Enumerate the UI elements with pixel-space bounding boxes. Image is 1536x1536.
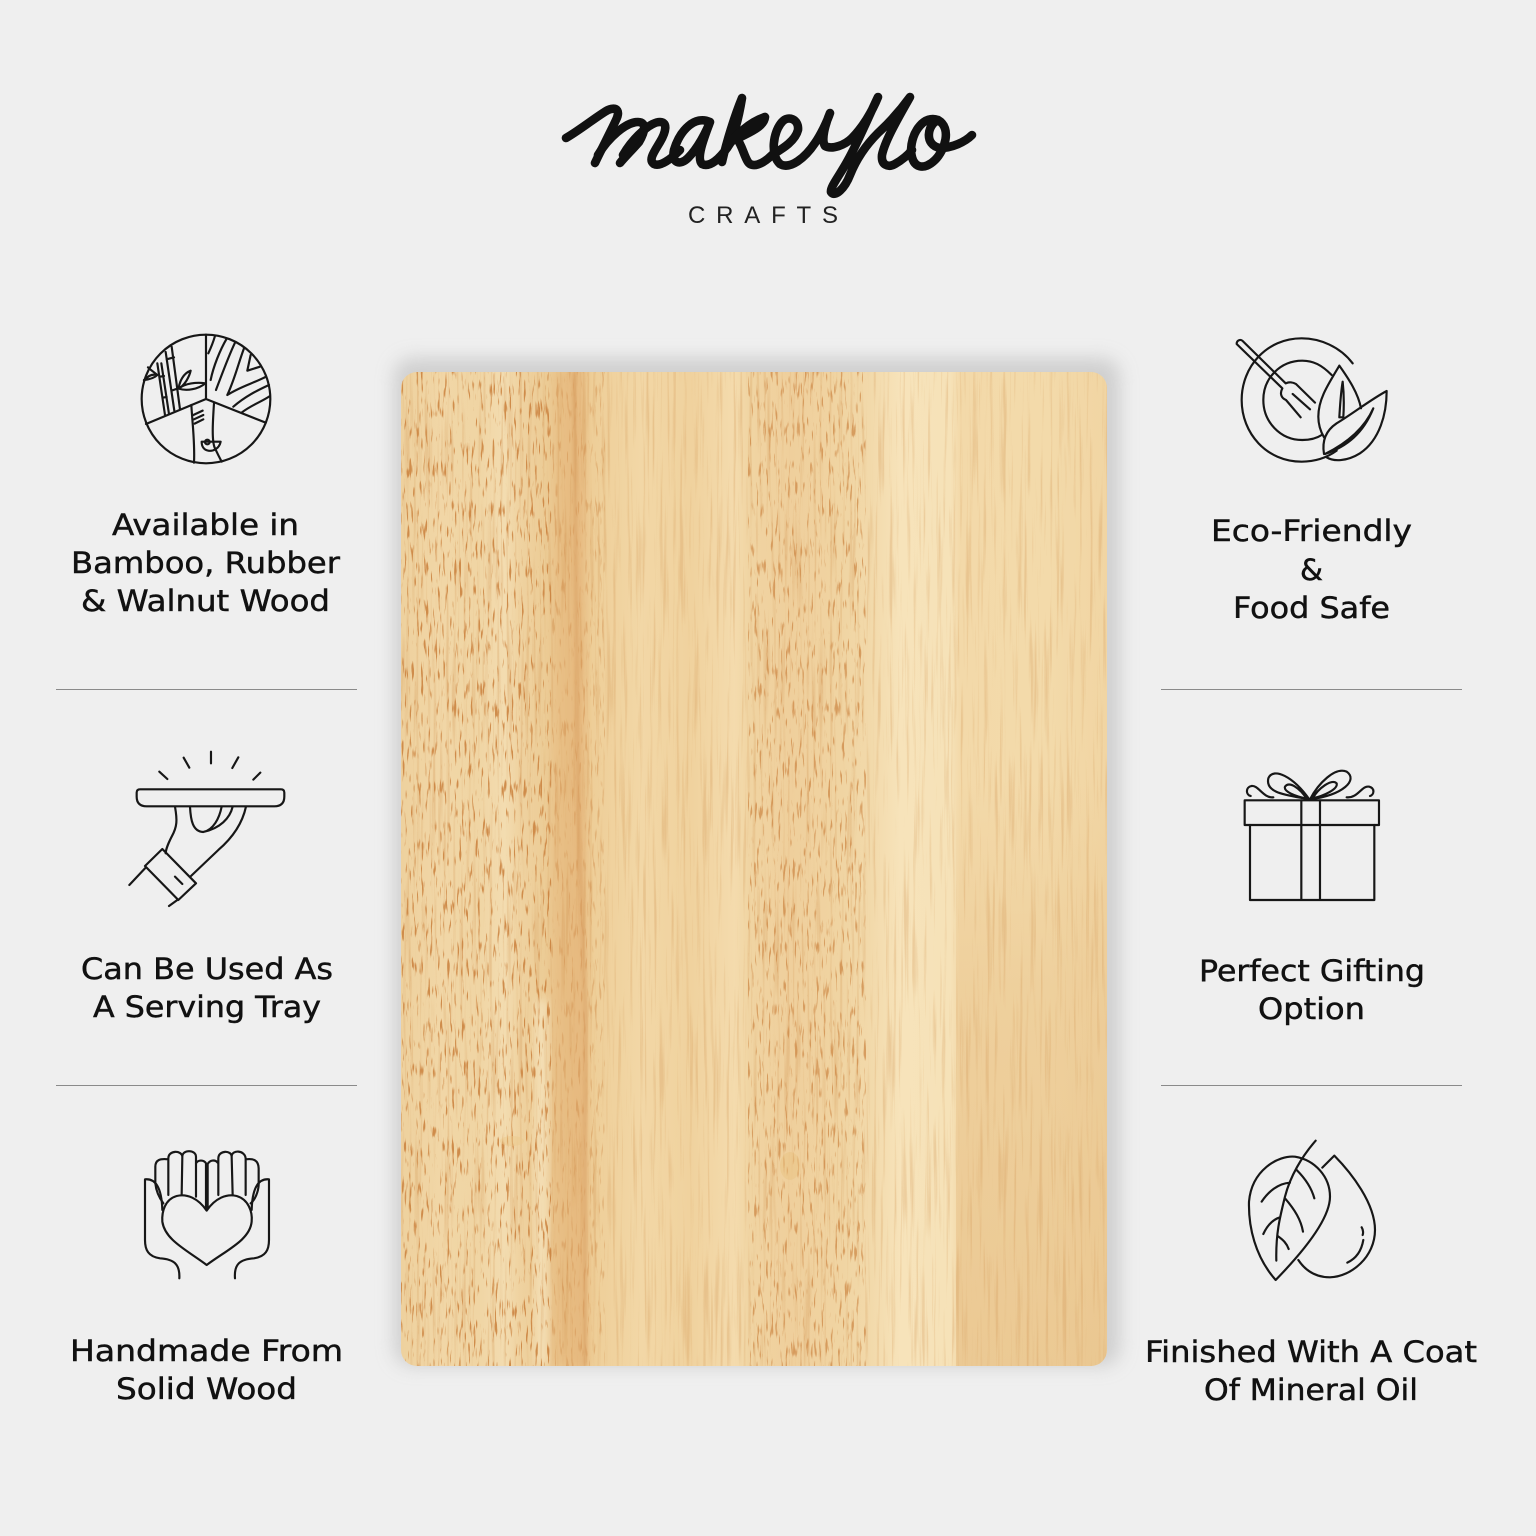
panel: eco friendly feature — [1211, 338, 1412, 625]
icon: hand holding tray — [129, 752, 284, 906]
text: wood options: Bamboo, Rubber — [71, 546, 340, 580]
text: handmade — [70, 1334, 343, 1406]
text: mineral oil: Finished With A Coat — [1145, 1335, 1477, 1369]
text: mineral oil: Of Mineral Oil — [1204, 1373, 1418, 1407]
text: wood options: & Walnut Wood — [81, 584, 330, 618]
text: gifting: Perfect Gifting — [1199, 954, 1425, 988]
text: gifting: Option — [1258, 992, 1365, 1026]
text: serving tray: Can Be Used As — [81, 952, 333, 986]
panel: wooden board product image — [394, 358, 1120, 1366]
logo wordmark script — [566, 97, 972, 194]
panel: gifting feature — [1199, 771, 1425, 1026]
text: eco friendly: Food Safe — [1233, 591, 1390, 625]
text: eco friendly — [1211, 514, 1412, 625]
text: wood options: Available in — [112, 508, 299, 542]
text: wood options — [71, 508, 340, 618]
panel: mineral oil feature — [1145, 1141, 1477, 1407]
text: eco friendly: & — [1300, 553, 1323, 587]
icon: gift box — [1245, 771, 1379, 900]
panel: serving tray feature — [81, 752, 333, 1024]
text: mineral oil — [1145, 1335, 1477, 1407]
icon: plate fork and leaves — [1237, 338, 1387, 462]
text: serving tray — [81, 952, 333, 1024]
icon: three wood types circle — [142, 335, 270, 463]
logo subtitle CRAFTS: CRAFTS — [688, 202, 838, 229]
text: handmade: Solid Wood — [116, 1372, 297, 1406]
panel: handmade feature — [70, 1151, 343, 1406]
icon: leaf and oil drop — [1249, 1141, 1375, 1280]
panel: wood options feature — [71, 335, 340, 618]
icon: hands holding heart — [145, 1151, 269, 1278]
text: handmade: Handmade From — [70, 1334, 343, 1368]
logo: makerflo crafts — [566, 97, 972, 229]
text: eco friendly: Eco-Friendly — [1211, 514, 1412, 548]
text: serving tray: A Serving Tray — [93, 990, 321, 1024]
text: gifting — [1199, 954, 1425, 1026]
